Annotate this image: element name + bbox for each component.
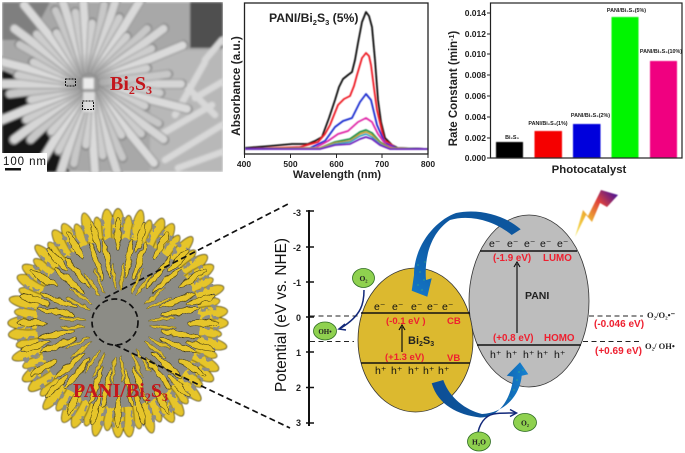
label: Bi2S3: 2 <box>129 83 135 97</box>
panel: Bi2S3 band ellipse: h⁺ <box>375 365 387 377</box>
chart title: PANI/Bi2S3 (5%): 3 <box>325 18 329 27</box>
panel: Bi2S3 band ellipse: e⁻ <box>442 301 454 313</box>
text: Bi2S3 energies <box>385 316 461 364</box>
label: PANI/Bi2S3: PANI/Bi <box>73 380 145 402</box>
panel: Bi2S3 band ellipse: h⁺ <box>391 365 403 377</box>
panel: Bi2S3 band ellipse: e⁻ <box>392 301 404 313</box>
axes frame <box>244 3 428 154</box>
reaction: O2 to OH radical <box>314 268 374 340</box>
panel: PANI band ellipse: h⁺ <box>506 349 518 361</box>
x axis title: Photocatalyst <box>552 164 627 176</box>
x tick labels: 600 <box>329 159 344 169</box>
panel: PANI band ellipse: PANI <box>525 290 549 302</box>
label: Bi2S3: Bi <box>110 73 129 95</box>
label: Bi2S3: S <box>135 73 146 95</box>
y tick labels: 0.012 <box>465 29 486 39</box>
callout: dashed zoom circle and lines <box>92 203 290 428</box>
bar labels <box>505 8 682 141</box>
label: PANI/Bi2S3: 3 <box>162 390 168 404</box>
panel: Bi2S3 band ellipse: h⁺ <box>423 365 435 377</box>
text: Bi2S3 energies: VB <box>447 353 460 364</box>
panel: SEM micrograph of Bi2S3 <box>2 2 223 172</box>
icon: lightning bolt <box>575 190 618 237</box>
text: Bi2S3 energies: CB <box>447 316 461 327</box>
axis: potential scale: 0 <box>296 313 301 323</box>
bubble: O2: O₂ <box>359 274 368 283</box>
y axis title: Absorbance (a.u.) <box>229 36 243 136</box>
y tick labels: 0.004 <box>465 112 486 122</box>
bubble: H2O: H₂O <box>472 438 486 446</box>
x tick labels: 800 <box>421 159 435 169</box>
x tick labels: 700 <box>375 159 389 169</box>
chart title: PANI/Bi2S3 (5%): (5%) <box>329 11 358 25</box>
panel: Bi2S3 band ellipse: e⁻ <box>411 301 423 313</box>
y tick labels: 0.010 <box>465 49 486 59</box>
text: PANI energies: (-1.9 eV) <box>493 253 531 264</box>
panel: PANI band ellipse: e⁻ <box>507 238 519 250</box>
scale bar: 100 nm <box>0 153 47 173</box>
x tick labels: 500 <box>283 159 298 169</box>
chart: rate constant bars <box>448 3 682 176</box>
icon: dashed selection boxes <box>66 79 94 110</box>
y axis title: Potential: Potential (eV vs. NHE) <box>273 238 290 392</box>
panel: Bi2S3 band ellipse <box>358 268 473 412</box>
panel: PANI band ellipse: e⁻ <box>540 238 552 250</box>
panel: PANI band ellipse: e⁻ <box>557 238 569 250</box>
panel: PANI band ellipse <box>469 215 589 387</box>
panel: PANI band ellipse: e⁻ <box>489 238 501 250</box>
arrow: electron transfer from PANI to Bi2S3 <box>412 211 521 297</box>
panel: Bi2S3 band ellipse: 2 <box>419 341 423 348</box>
label: Bi2S3: 3 <box>146 83 152 97</box>
bar labels: PANI/Bi₂S₃(5%) <box>607 8 646 14</box>
bubble: OH radical: OH• <box>318 328 332 336</box>
panel: Bi2S3 band ellipse: Bi <box>408 335 419 347</box>
panel: Bi2S3 band ellipse: h⁺ <box>408 365 420 377</box>
reaction: H2O to O2 <box>468 410 536 451</box>
panel: PANI band ellipse: e⁻ <box>524 238 536 250</box>
chart title: PANI/Bi2S3 (5%): S <box>317 11 325 25</box>
y tick labels: 0.002 <box>465 133 486 143</box>
text: Bi2S3 energies: (-0.1 eV ) <box>386 316 426 327</box>
label: PANI/Bi2S3: S <box>151 380 162 402</box>
panel: PANI band ellipse: h⁺ <box>490 349 502 361</box>
scale bar: 100 nm: 100 nm <box>3 156 46 168</box>
axis: potential scale <box>293 208 314 428</box>
y tick labels <box>465 8 486 163</box>
x axis title: Wavelength (nm) <box>293 169 381 181</box>
y axis title: -1 <box>449 34 456 41</box>
panel: Bi2S3 band ellipse: S <box>423 335 430 347</box>
axis: potential scale: -1 <box>293 278 301 288</box>
y tick labels: 0.008 <box>465 70 486 80</box>
panel: Bi2S3 band ellipse: e⁻ <box>427 301 439 313</box>
x tick labels: 400 <box>237 159 251 169</box>
bar labels: Bi₂S₃ <box>505 135 519 141</box>
arrow: Bi2S3 excitation <box>399 325 405 352</box>
chart title: PANI/Bi2S3 (5%): PANI/Bi <box>269 11 313 25</box>
axis: potential scale: 1 <box>296 348 301 358</box>
y ticks <box>487 13 490 158</box>
y axis title: ) <box>448 31 460 35</box>
reference dashed lines <box>310 316 643 342</box>
bar labels: PANI/Bi₂S₃(1%) <box>528 121 568 127</box>
panel: Bi2S3 band ellipse: h⁺ <box>438 365 450 377</box>
chart title: PANI/Bi2S3 (5%): 2 <box>313 18 317 27</box>
text: PANI energies: (+0.8 eV) <box>493 333 534 344</box>
chart: absorbance spectra <box>229 3 435 181</box>
axis: potential scale: 2 <box>296 383 301 393</box>
text: PANI energies: HOMO <box>544 333 575 344</box>
x tick labels <box>237 159 435 169</box>
labels: redox potentials: (+0.69 eV) <box>595 346 642 357</box>
labels: redox potentials: (-0.046 eV) <box>594 319 644 330</box>
text: PANI energies <box>493 253 575 344</box>
y tick labels: 0.000 <box>465 153 486 163</box>
label: PANI/Bi2S3: 2 <box>145 390 151 404</box>
panel: PANI band ellipse: h⁺ <box>523 349 535 361</box>
bar labels: PANI/Bi₂S₃(10%) <box>640 49 682 55</box>
bars <box>496 17 677 158</box>
bubble: O2: O₂ <box>521 418 530 428</box>
panel: PANI band ellipse: h⁺ <box>554 349 566 361</box>
arrow: PANI excitation <box>514 262 520 333</box>
labels: redox potentials: O₂/ OH• <box>645 341 675 351</box>
axis: potential scale: -3 <box>293 208 301 218</box>
panel: Bi2S3 band ellipse: e⁻ <box>374 301 386 313</box>
y axis title: Rate Constant (min <box>448 41 460 146</box>
y tick labels: 0.006 <box>465 91 486 101</box>
text: PANI energies: LUMO <box>543 253 572 264</box>
plot lines: spectra <box>245 12 428 149</box>
illustration: PANI/Bi2S3 flower-like composite <box>0 197 239 449</box>
axis: potential scale: 3 <box>296 418 301 428</box>
text: Bi2S3 energies: (+1.3 eV) <box>385 352 424 363</box>
bar labels: PANI/Bi₂S₃(2%) <box>571 113 610 119</box>
labels: redox potentials <box>594 310 676 357</box>
axis: potential scale: -2 <box>293 243 301 253</box>
labels: redox potentials: O₂/O₂•⁻ <box>647 310 676 320</box>
panel: PANI band ellipse: h⁺ <box>537 349 549 361</box>
axes frame <box>490 3 682 158</box>
y tick labels: 0.014 <box>465 8 486 18</box>
panel: Bi2S3 band ellipse: 3 <box>430 341 434 348</box>
arrow: hole transfer from Bi2S3 to PANI <box>432 362 528 418</box>
